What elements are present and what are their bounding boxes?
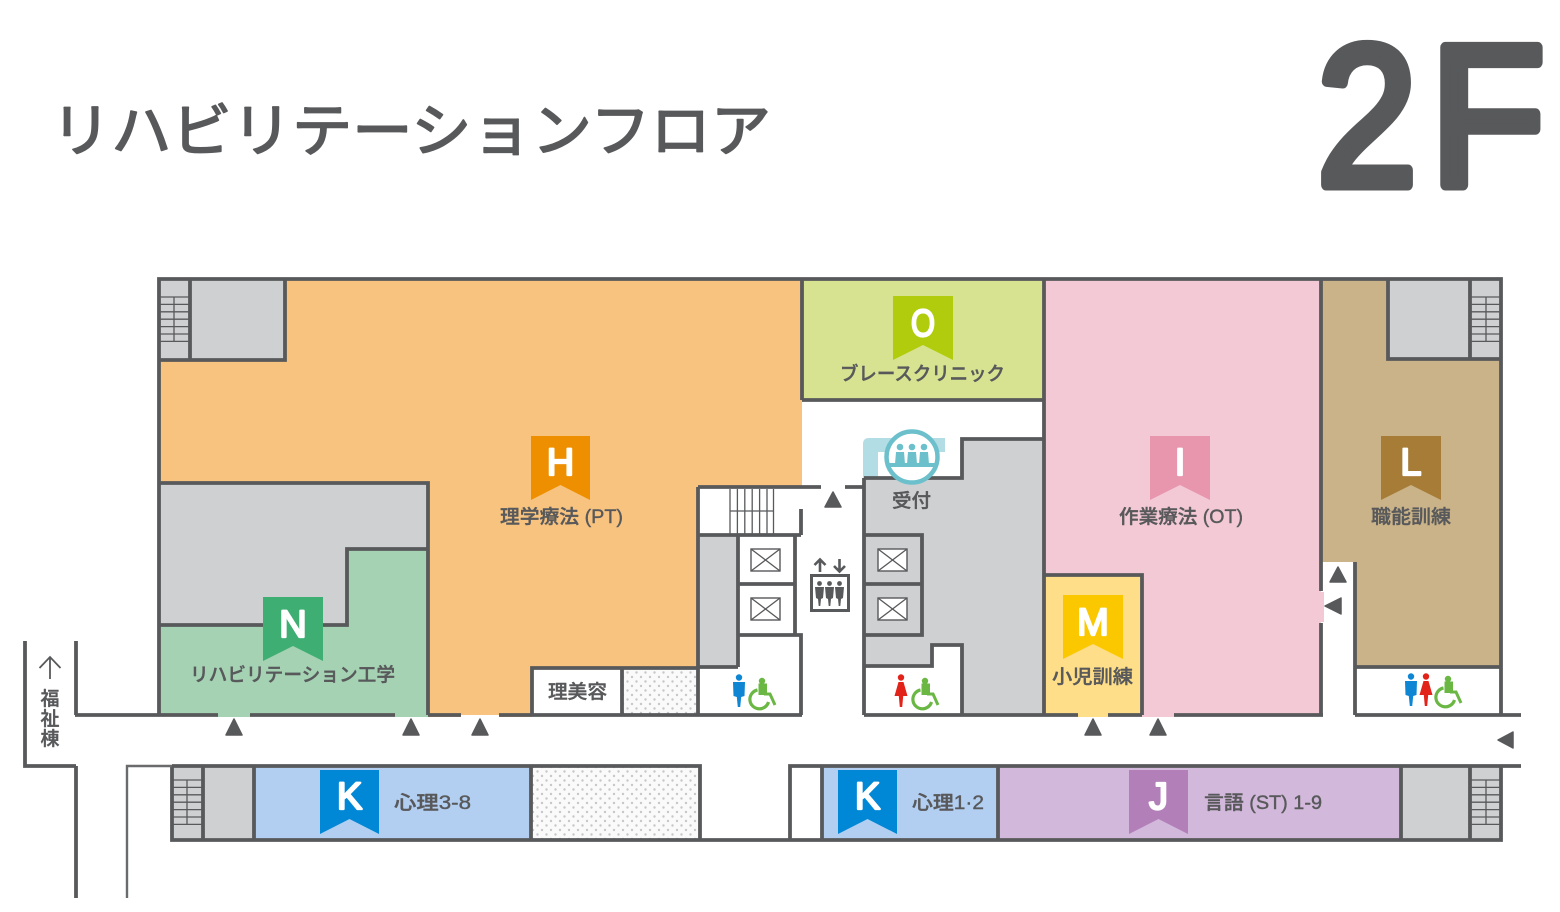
floor number: 2F: F <box>1430 5 1545 228</box>
stairs: central <box>730 489 774 534</box>
ribbon: H <box>531 436 590 500</box>
room: core storage <box>698 535 738 667</box>
ribbon: J: J <box>1149 776 1168 818</box>
reception counter <box>863 438 945 478</box>
restroom icons: right core <box>894 674 938 709</box>
ribbon: O <box>893 296 953 360</box>
room: storage above N <box>159 483 428 625</box>
ribbon: M: M <box>1077 602 1109 644</box>
room: 小児訓練 M area <box>1045 575 1142 715</box>
ribbon: L <box>1381 436 1441 500</box>
elevator shafts <box>751 549 907 620</box>
room: central storage <box>864 439 1044 715</box>
label: 理美容: 理美容 <box>548 681 607 703</box>
room: ブレースクリニック O area <box>803 279 1044 400</box>
label: 心理3-8: 心理3-8 <box>394 792 471 814</box>
direction: 福祉棟 <box>40 657 60 750</box>
stairs: top right <box>1470 297 1501 341</box>
label: 心理1・2: 心理1·2 <box>912 792 984 814</box>
label: 受付: 受付 <box>892 490 931 512</box>
room: 心理1・2 K area <box>822 766 998 840</box>
stairs: bottom right <box>1470 780 1501 824</box>
label: ブレースクリニック: ブレースクリニック <box>840 362 1005 385</box>
room: リハビリテーション工学 N area <box>159 549 428 717</box>
icon: reception <box>886 432 938 482</box>
label: 言語: 言語 (ST) 1-9 <box>1204 793 1322 814</box>
ribbon: J <box>1129 770 1188 834</box>
floor number: 2F <box>1317 5 1545 228</box>
room: dotted area <box>622 668 698 715</box>
restroom icons: far right <box>1405 673 1461 707</box>
ribbon: N: N <box>279 604 307 646</box>
arrow markers <box>226 492 1513 748</box>
label: 小児訓練: 小児訓練 <box>1052 666 1133 688</box>
ribbon: M <box>1063 595 1123 659</box>
ribbon: I <box>1150 436 1210 500</box>
label: リハビリテーション工学: リハビリテーション工学 <box>190 664 395 686</box>
ribbon: K left <box>320 770 379 834</box>
ribbon: K right: K <box>855 776 880 818</box>
room: storage top right <box>1387 279 1501 360</box>
direction: 福祉棟: 福 <box>40 688 60 710</box>
label: 職能訓練: 職能訓練 <box>1371 506 1451 528</box>
room: K lower left stairs and storage <box>172 766 254 840</box>
floor plan <box>25 279 1521 898</box>
room: lower dotted area <box>531 766 699 840</box>
stairs: top left <box>159 297 190 341</box>
ribbon: I: I <box>1175 442 1185 484</box>
restroom icons: left core <box>733 674 775 709</box>
ribbon: L: L <box>1400 442 1422 484</box>
room: 心理3-8 K area <box>254 766 531 840</box>
label: 作業療法: 作業療法 (OT) <box>1119 506 1243 528</box>
direction: 福祉棟: 棟 <box>40 728 60 750</box>
stairs: bottom left <box>172 780 203 824</box>
ribbon: N <box>263 597 323 661</box>
ribbon: H: H <box>547 442 574 484</box>
title: リハビリテーションフロア <box>51 84 771 168</box>
room: 作業療法 I area <box>1045 279 1324 717</box>
ribbon: O: O <box>911 303 935 345</box>
walls <box>25 279 1521 898</box>
room: 言語 J area <box>998 766 1401 840</box>
ribbon: K left: K <box>337 776 362 818</box>
room: 理学療法 H area <box>159 279 802 717</box>
label: 理学療法: 理学療法 (PT) <box>500 506 623 528</box>
direction: 福祉棟: 祉 <box>40 708 60 730</box>
room: lower right storage <box>1401 766 1501 840</box>
room: 職能訓練 L area <box>1321 279 1501 667</box>
room: storage top left <box>159 279 285 360</box>
icon: elevator <box>812 559 848 610</box>
floor number: 2F: 2 <box>1317 5 1417 228</box>
ribbon: K right <box>838 770 897 834</box>
